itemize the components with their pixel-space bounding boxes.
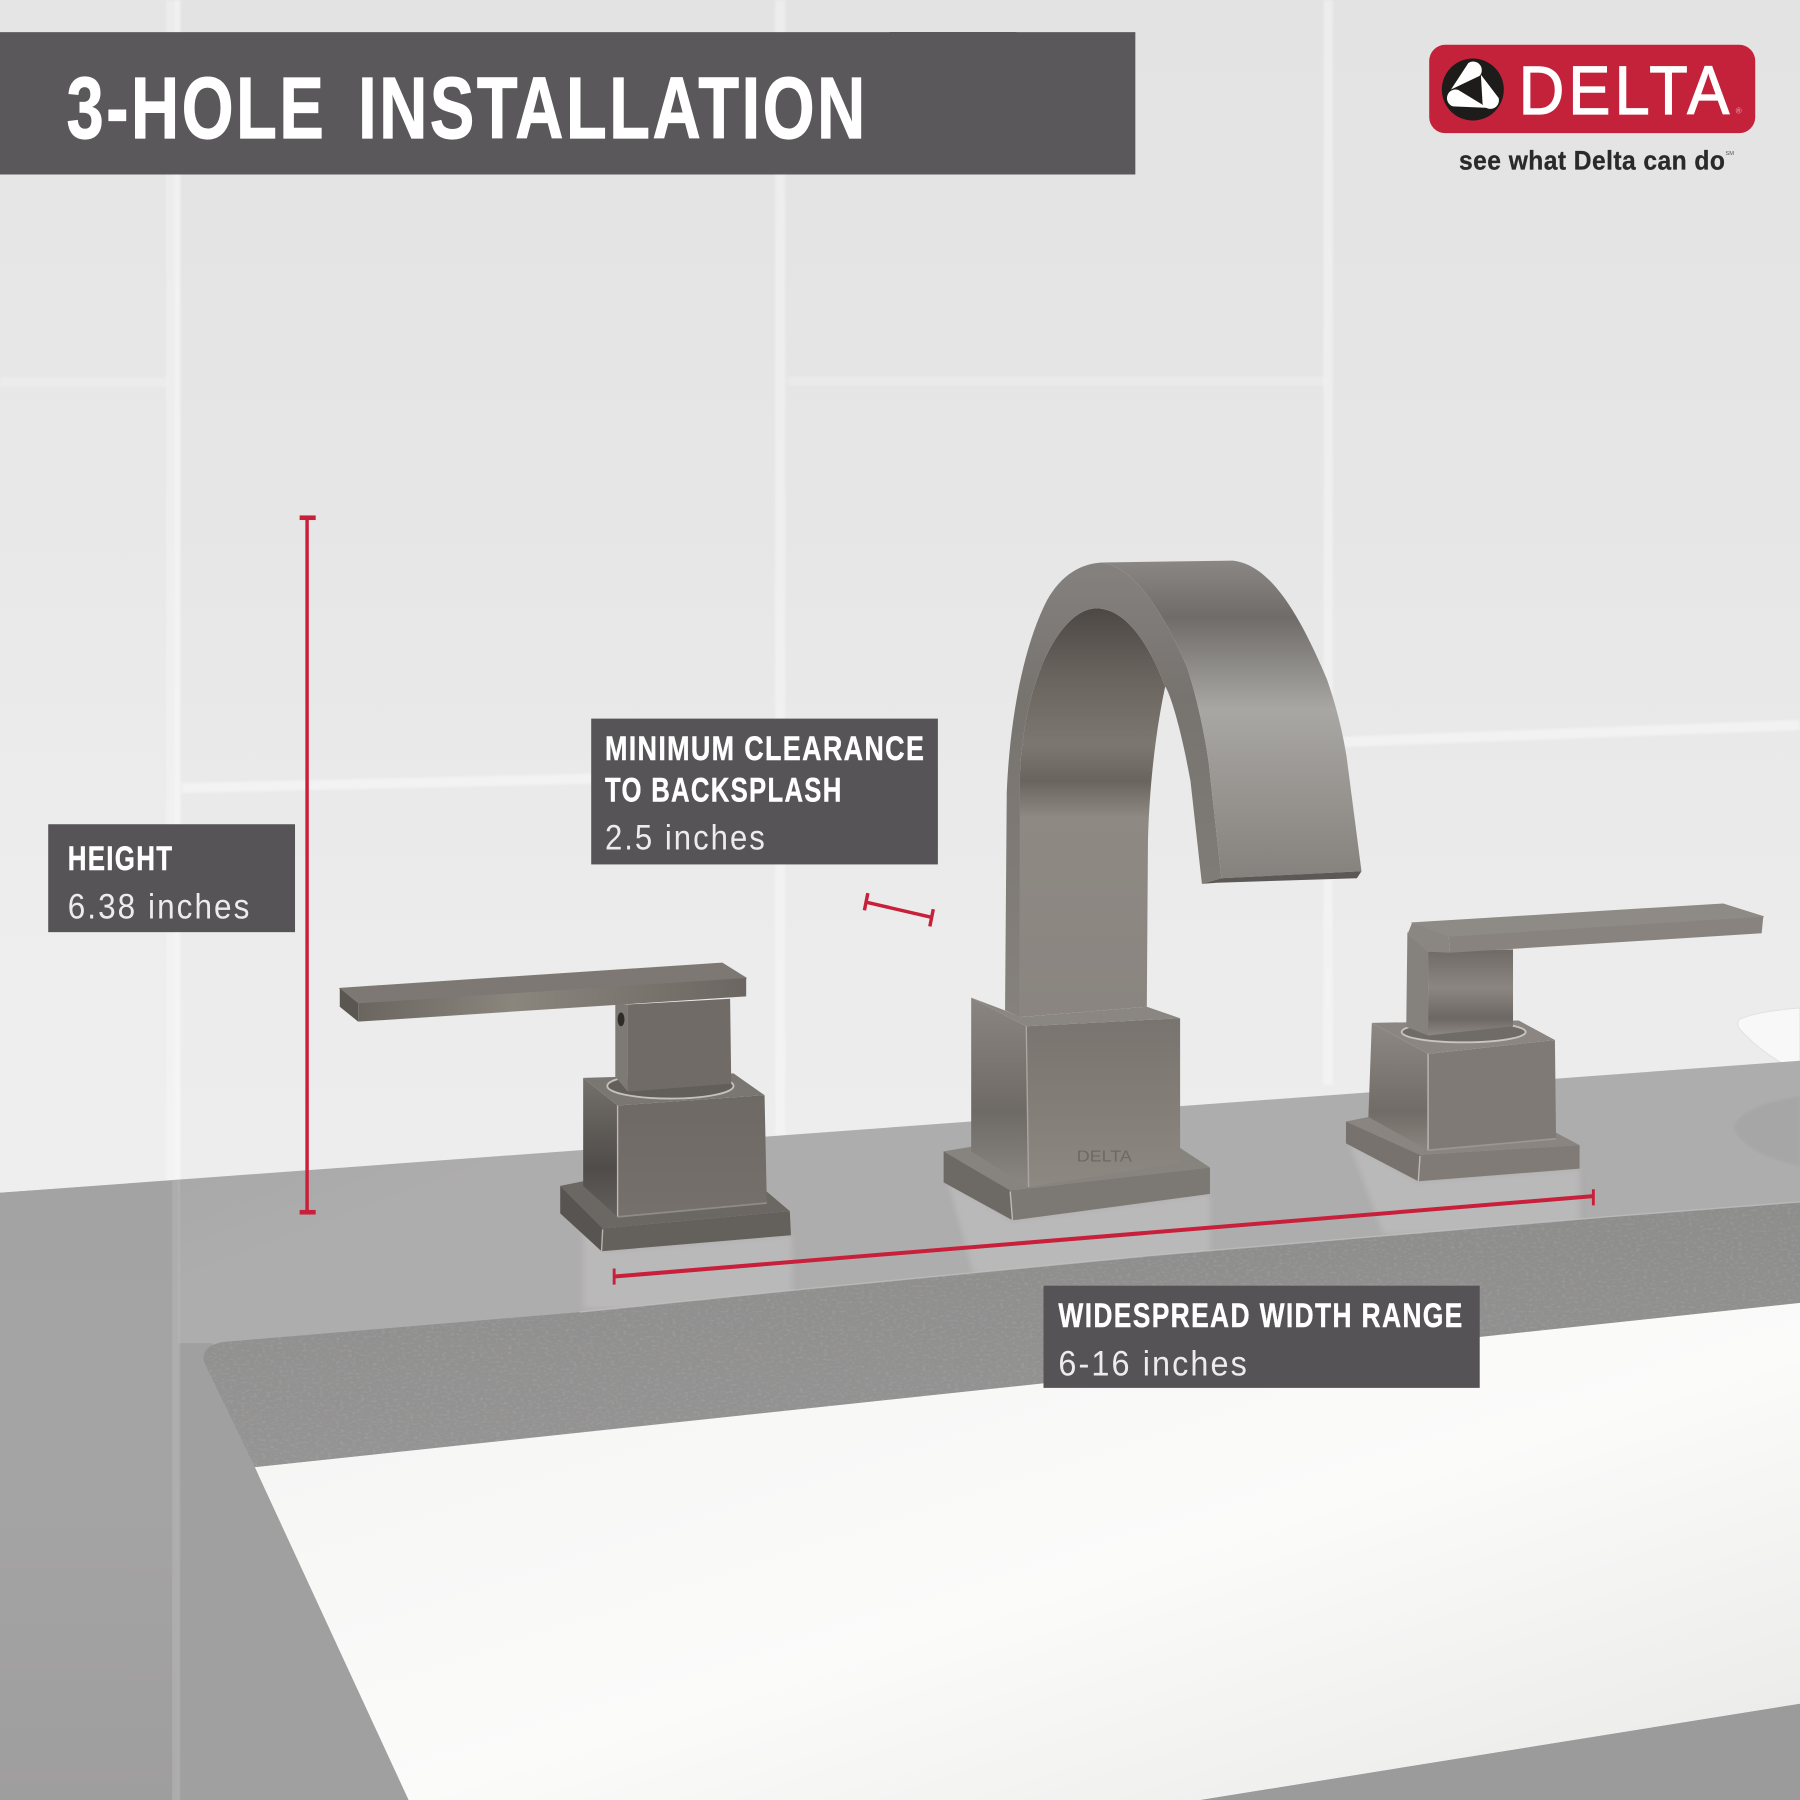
logo wordmark: DELTA <box>1519 52 1733 129</box>
center base block: DELTA <box>1077 1148 1132 1166</box>
minimum clearance callout <box>591 719 938 864</box>
center base plate <box>944 1147 1210 1220</box>
widespread width callout: WIDESPREAD WIDTH RANGE <box>1058 1297 1464 1335</box>
logo triangle icon <box>1442 59 1504 121</box>
clearance dimension line <box>864 893 933 926</box>
minimum clearance callout: MINIMUM CLEARANCE <box>605 730 925 768</box>
right handle block <box>1368 1021 1556 1150</box>
height dimension line <box>300 515 316 1215</box>
right handle <box>1346 904 1763 1181</box>
right handle plate <box>1346 1117 1580 1181</box>
right handle neck <box>1406 932 1513 1035</box>
spout inner arch surface <box>1020 608 1165 1017</box>
left handle block <box>583 1073 767 1217</box>
center spout <box>1005 561 1361 1017</box>
countertop front bevel <box>195 1194 1800 1475</box>
spout tip <box>1202 871 1361 884</box>
height callout: 6.38 inches <box>68 886 251 926</box>
right handle lever <box>1407 904 1763 953</box>
registered mark: ® <box>1736 107 1742 116</box>
title banner: 3-HOLE INSTALLATION <box>67 60 868 157</box>
logo red badge <box>1429 45 1755 133</box>
center base <box>944 998 1210 1220</box>
logo tagline: SM <box>1725 151 1734 157</box>
spout front face <box>1102 561 1361 878</box>
height callout <box>48 824 295 932</box>
tiled wall background <box>0 0 1800 1263</box>
right handle neck ring <box>1402 1022 1526 1042</box>
title banner <box>0 32 1135 174</box>
left handle <box>340 963 791 1251</box>
countertop <box>0 1061 1800 1800</box>
Delta logo <box>1429 45 1755 175</box>
logo tagline: see what Delta can do <box>1459 145 1725 175</box>
widespread width dimension line <box>614 1189 1593 1285</box>
left handle plate <box>560 1181 791 1251</box>
center base block <box>971 998 1180 1187</box>
spout arch side band <box>1005 562 1221 1017</box>
widespread width callout: 6-16 inches <box>1058 1343 1249 1383</box>
minimum clearance callout: 2.5 inches <box>605 817 767 857</box>
minimum clearance callout: TO BACKSPLASH <box>605 771 843 809</box>
height callout: HEIGHT <box>68 840 173 878</box>
left handle lever <box>340 963 746 1022</box>
left handle neck <box>615 999 731 1092</box>
widespread width callout <box>1043 1286 1480 1388</box>
faucet reflections on countertop <box>583 1142 1580 1309</box>
soap dish at right edge <box>1738 1008 1800 1072</box>
sink basin <box>255 1303 1800 1800</box>
left handle neck ring <box>607 1073 734 1099</box>
